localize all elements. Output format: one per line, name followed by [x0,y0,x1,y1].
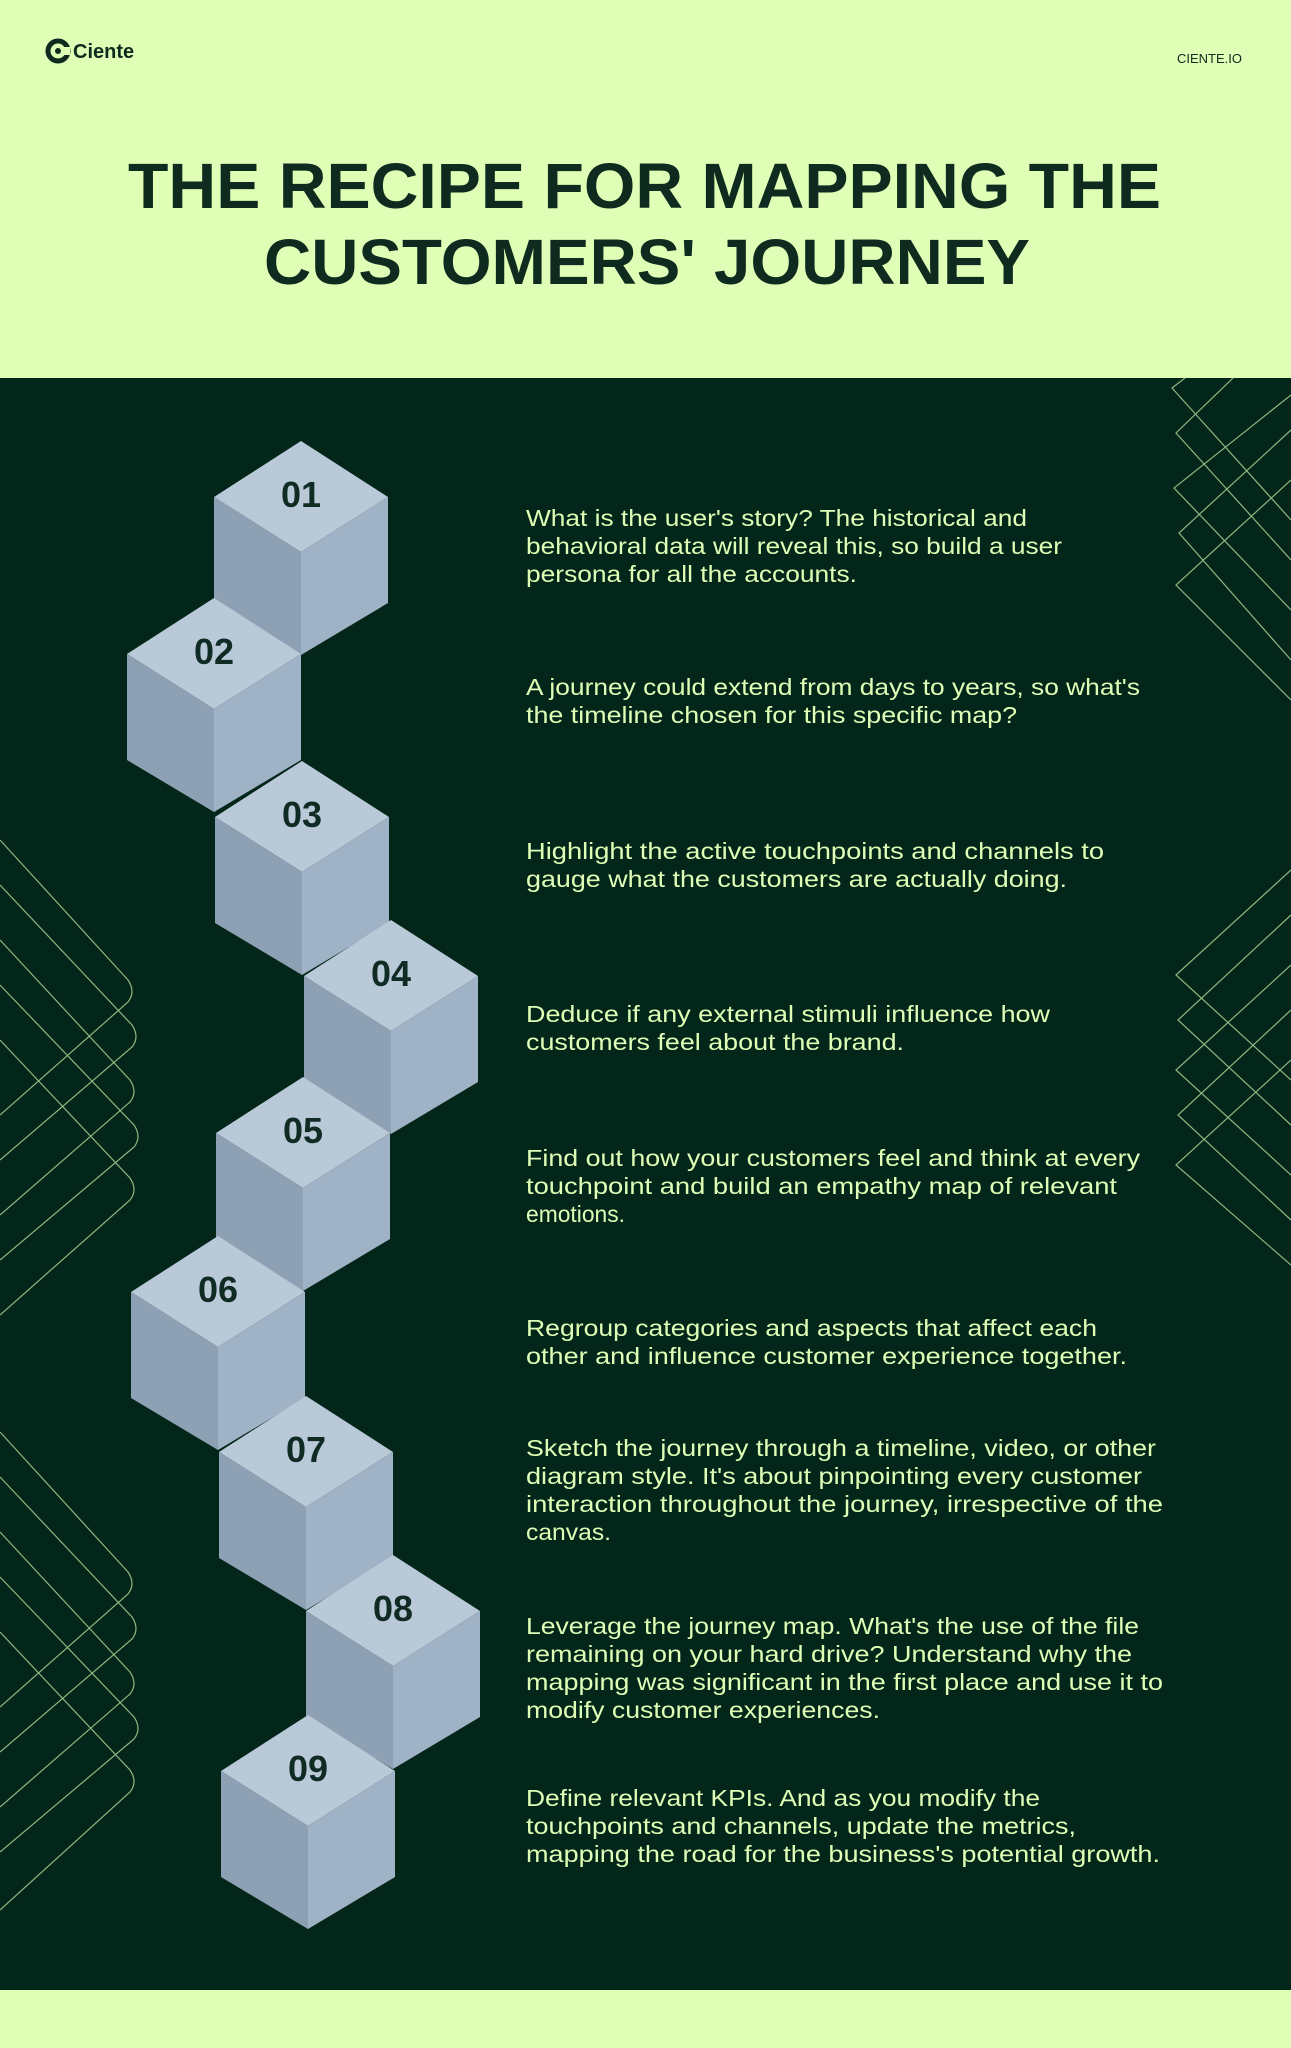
cube 08: 08 [373,1588,413,1629]
text 08: Leverage the journey map. What's the use of the file [526,1613,1139,1639]
cube 09: 09 [288,1748,328,1789]
cube 07: 07 [286,1429,326,1470]
cube 07 [219,1396,393,1610]
logo: Ciente [73,41,134,63]
decorative lines left middle [0,840,138,1315]
cube 06 [131,1236,305,1450]
text 03 [526,838,1104,892]
decorative lines right top [1172,378,1291,700]
text 09: mapping the road for the business's potential growth. [526,1841,1160,1867]
decorative lines right middle [1176,870,1291,1265]
cube 05: 05 [283,1110,323,1151]
title: THE RECIPE FOR MAPPING THE [128,150,1161,222]
text 07 [526,1435,1163,1545]
cube 09 [221,1715,395,1929]
site url: CIENTE.IO [1177,51,1242,66]
text 05: emotions. [526,1201,625,1227]
dark main panel [0,378,1291,1990]
text 01: What is the user's story? The historical and [526,505,1027,531]
text 05: touchpoint and build an empathy map of relevant [526,1173,1118,1199]
text 06: other and influence customer experience together. [526,1343,1127,1369]
text 08: remaining on your hard drive? Understand why the [526,1641,1132,1667]
cube 02 [127,598,301,812]
text 02: A journey could extend from days to years, so what's [526,674,1140,700]
cube 01: 01 [281,474,321,515]
text 09 [526,1785,1160,1867]
text 09: touchpoints and channels, update the metrics, [526,1813,1076,1839]
text 07: Sketch the journey through a timeline, video, or other [526,1435,1156,1461]
text 02 [526,674,1140,728]
cube 03 [215,761,389,975]
text 08 [526,1613,1163,1723]
text 02: the timeline chosen for this specific map? [526,702,1017,728]
text 01: behavioral data will reveal this, so build a user [526,533,1062,559]
text 07: interaction throughout the journey, irrespective of the [526,1491,1163,1517]
cube 04 [304,920,478,1134]
cube 08 [306,1555,480,1769]
title [128,150,1161,298]
text 04: Deduce if any external stimuli influence how [526,1001,1050,1027]
text 04: customers feel about the brand. [526,1029,904,1055]
decorative lines left bottom [0,1432,138,1910]
cube staircase [127,441,480,1929]
cube 03: 03 [282,794,322,835]
text 03: gauge what the customers are actually doing. [526,866,1067,892]
text 05 [526,1145,1141,1227]
text 06 [526,1315,1127,1369]
cube 02: 02 [194,631,234,672]
text 06: Regroup categories and aspects that affect each [526,1315,1097,1341]
text 07: canvas. [526,1519,611,1545]
cube 05 [216,1077,390,1291]
cube 04: 04 [371,953,411,994]
title: CUSTOMERS' JOURNEY [264,226,1030,298]
text 09: Define relevant KPIs. And as you modify the [526,1785,1040,1811]
text 08: modify customer experiences. [526,1697,880,1723]
text 08: mapping was significant in the first place and use it to [526,1669,1163,1695]
text 03: Highlight the active touchpoints and channels to [526,838,1104,864]
text 01: persona for all the accounts. [526,561,857,587]
text 04 [526,1001,1050,1055]
cube 01 [214,441,388,655]
text 07: diagram style. It's about pinpointing every customer [526,1463,1142,1489]
text 05: Find out how your customers feel and think at every [526,1145,1141,1171]
cube 06: 06 [198,1269,238,1310]
text 01 [526,505,1062,587]
step texts [526,505,1163,1867]
